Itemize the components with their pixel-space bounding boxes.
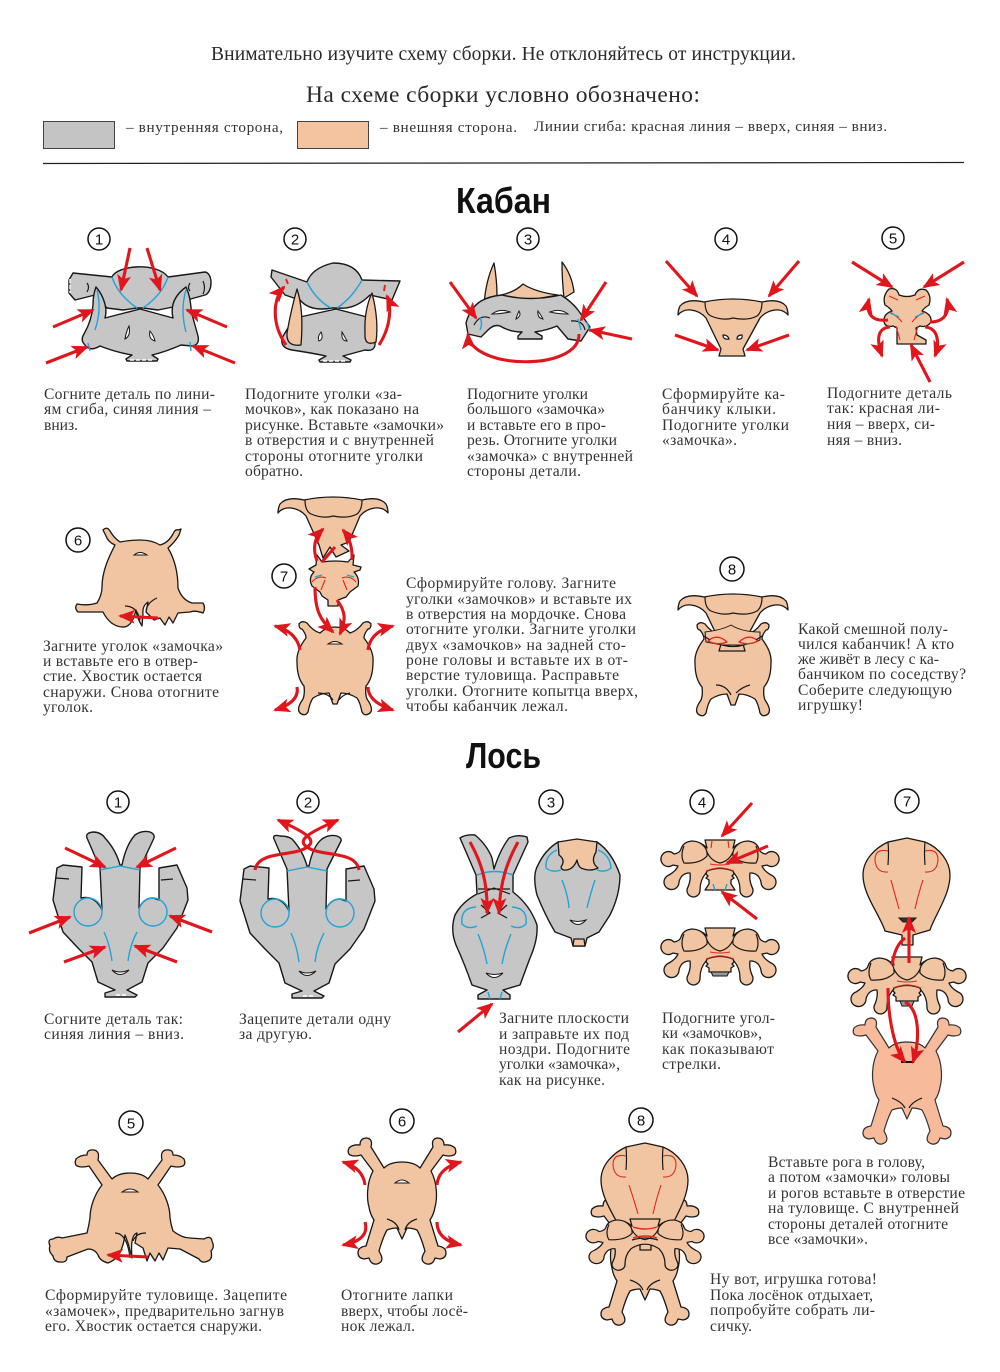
instruction text: «замочка» с внутренней bbox=[467, 448, 633, 465]
panel: moose step 3 bbox=[453, 790, 630, 1089]
arrows bbox=[29, 848, 212, 962]
legend swatch: outer side bbox=[298, 122, 368, 148]
step number 4: 4 bbox=[722, 232, 730, 248]
closing text: сичку. bbox=[710, 1318, 752, 1335]
instruction text: как на рисунке. bbox=[499, 1072, 605, 1089]
legend bbox=[44, 118, 887, 148]
heading: Лось: Лось bbox=[466, 735, 541, 776]
step number 3 bbox=[517, 228, 539, 250]
instruction text: «замочек», предварительно загнув bbox=[45, 1303, 284, 1320]
instruction text: Отогните лапки bbox=[341, 1287, 453, 1304]
part: boar body with legs bbox=[76, 528, 204, 627]
step number 4: 4 bbox=[698, 794, 706, 812]
legend: – внешняя сторона. bbox=[379, 119, 517, 136]
legend: Линии сгиба: красная линия – вверх, синяя – вниз. bbox=[534, 118, 887, 135]
closing text: Пока лосёнок отдыхает, bbox=[710, 1287, 873, 1304]
crossing arrows bbox=[255, 820, 359, 870]
closing text: банчиком по соседству? bbox=[798, 666, 966, 683]
instruction text: стие. Хвостик остается bbox=[43, 668, 202, 685]
closing text: Какой смешной полу- bbox=[798, 621, 948, 638]
instruction text: за другую. bbox=[239, 1026, 312, 1043]
closing text: Соберите следующую bbox=[798, 682, 952, 699]
arrows bbox=[275, 529, 393, 710]
instruction text bbox=[245, 386, 444, 480]
step number 7: 7 bbox=[280, 568, 288, 586]
step number 6 bbox=[66, 528, 90, 552]
part: boar folded ring bbox=[466, 262, 590, 341]
instruction text: снаружи. Снова отогните bbox=[43, 684, 219, 701]
instruction text: Сформируйте туловище. Зацепите bbox=[45, 1287, 287, 1304]
arrows bbox=[343, 1162, 461, 1245]
step number 1 bbox=[88, 228, 110, 250]
part: antler collar upper bbox=[661, 840, 779, 897]
instruction text: Согните деталь так: bbox=[44, 1011, 183, 1028]
part: moose body spread bbox=[49, 1150, 213, 1263]
instruction text: уголок. bbox=[43, 699, 93, 716]
part: boar inner side bbox=[69, 267, 211, 361]
instruction text: Загните уголок «замочка» bbox=[43, 638, 223, 655]
assembled moose bbox=[586, 1143, 704, 1325]
arrow bbox=[120, 616, 158, 618]
closing text bbox=[797, 621, 966, 714]
closing text: же живёт в лесу с ка- bbox=[797, 651, 939, 668]
instruction text bbox=[768, 1154, 965, 1248]
step number 7: 7 bbox=[903, 794, 911, 810]
part: boar head top bbox=[278, 497, 388, 558]
instruction text: уголки «замочка», bbox=[499, 1056, 620, 1073]
instruction text bbox=[662, 1010, 775, 1073]
instruction text bbox=[499, 1010, 630, 1089]
instruction text: а потом «замочки» головы bbox=[768, 1169, 951, 1186]
step number 4 bbox=[715, 228, 737, 250]
step number 5 bbox=[882, 227, 904, 249]
arrows bbox=[722, 803, 768, 919]
step number 3 bbox=[539, 790, 563, 814]
instruction text: Подогните деталь bbox=[827, 385, 952, 402]
panel: boar step 6 bbox=[43, 528, 223, 716]
instruction text: в отверстия на мордочке. Снова bbox=[406, 606, 626, 623]
closing text bbox=[710, 1271, 877, 1335]
step number 4 bbox=[690, 790, 714, 814]
step number 1 bbox=[107, 791, 129, 813]
header instructions: На схеме сборки условно обозначено: bbox=[306, 82, 700, 108]
instruction text: мочков», как показано на bbox=[245, 401, 419, 418]
arrow bbox=[108, 1255, 148, 1257]
heading: Кабан: Кабан bbox=[456, 180, 551, 221]
arrows bbox=[852, 262, 964, 382]
instruction text: стороны детали. bbox=[467, 463, 581, 480]
instruction text: «замочка». bbox=[662, 432, 737, 449]
step number 2: 2 bbox=[304, 794, 312, 812]
legend: – внутренняя сторона, bbox=[125, 119, 283, 136]
part: moose body bbox=[348, 1138, 456, 1264]
instruction text: Загните плоскости bbox=[499, 1010, 629, 1027]
instruction text bbox=[827, 385, 952, 449]
part: moose head inner side bbox=[53, 831, 188, 997]
step number 1: 1 bbox=[114, 794, 122, 812]
legend swatch: inner side bbox=[44, 122, 114, 148]
arrows bbox=[450, 282, 632, 362]
panel: moose step 1 bbox=[29, 791, 212, 1043]
part: boar with tabs bbox=[271, 263, 400, 362]
panel: moose step 2 bbox=[239, 791, 391, 1043]
part: antler collar lower bbox=[661, 928, 779, 985]
header instructions bbox=[211, 44, 796, 108]
step number 6: 6 bbox=[398, 1114, 406, 1130]
instruction text: верстие туловища. Расправьте bbox=[406, 667, 619, 684]
part: antler collar bbox=[848, 957, 966, 1014]
instruction text: уголки. Отогните копытца вверх, bbox=[406, 683, 638, 700]
panel: moose step 6 bbox=[341, 1109, 468, 1335]
instruction text: стороны деталей отогните bbox=[768, 1216, 948, 1233]
instruction text: няя – вниз. bbox=[827, 432, 902, 449]
panel: boar step 4 bbox=[662, 228, 799, 449]
instruction text: на туловище. С внутренней bbox=[768, 1200, 959, 1217]
instruction text bbox=[662, 386, 789, 449]
panel: moose step 7 bbox=[768, 789, 966, 1248]
instruction text: Подогните угол- bbox=[662, 1010, 775, 1027]
instruction text bbox=[406, 575, 638, 715]
step number 8 bbox=[720, 557, 744, 581]
step number 8: 8 bbox=[728, 562, 736, 578]
part: boar snout piece bbox=[309, 555, 361, 606]
panel: boar step 2 bbox=[245, 228, 444, 480]
instruction text: Вставьте рога в голову, bbox=[768, 1154, 925, 1171]
body detail bbox=[318, 642, 350, 700]
panel: moose step 5 bbox=[45, 1111, 287, 1335]
step number 2 bbox=[297, 791, 319, 813]
instruction text: стрелки. bbox=[662, 1056, 721, 1073]
instruction text: стороны отогните уголки bbox=[245, 448, 423, 465]
instruction text: и рогов вставьте в отверстие bbox=[768, 1185, 965, 1202]
instruction text bbox=[239, 1011, 391, 1043]
instruction text: его. Хвостик остается снаружи. bbox=[45, 1318, 262, 1335]
part: boar body bbox=[297, 622, 373, 715]
step number 8: 8 bbox=[637, 1112, 645, 1130]
panel: boar step 1 bbox=[44, 228, 235, 434]
step number 1: 1 bbox=[95, 232, 103, 248]
panel: moose step 8 bbox=[586, 1108, 877, 1335]
instruction text: чтобы кабанчик лежал. bbox=[406, 698, 568, 715]
part: moose head bbox=[863, 838, 950, 945]
instruction text: обратно. bbox=[245, 463, 303, 480]
instruction text: Сформируйте ка- bbox=[662, 386, 785, 403]
arrows bbox=[666, 261, 799, 350]
instruction text: и вставьте его в про- bbox=[467, 417, 606, 434]
instruction text: ям сгиба, синяя линия – bbox=[44, 401, 211, 418]
instruction text: и вставьте его в отвер- bbox=[43, 653, 198, 670]
instruction text: Согните деталь по лини- bbox=[44, 386, 215, 403]
part: boar folded head bbox=[884, 289, 931, 344]
arrows bbox=[888, 918, 918, 1062]
panel: boar step 3 bbox=[450, 228, 633, 480]
instruction text: и заправьте их под bbox=[499, 1026, 629, 1043]
panel: boar step 7 bbox=[272, 497, 638, 715]
instruction text: вверх, чтобы лосё- bbox=[341, 1303, 468, 1320]
step number 6 bbox=[390, 1109, 414, 1133]
instruction text: роне головы и вставьте их в от- bbox=[406, 652, 628, 669]
closing text: попробуйте собрать ли- bbox=[710, 1302, 875, 1319]
instruction text bbox=[43, 638, 223, 716]
step number 3: 3 bbox=[524, 232, 532, 248]
instruction text: Подогните уголки bbox=[467, 386, 588, 403]
closing text: Ну вот, игрушка готова! bbox=[710, 1271, 877, 1288]
instruction text: большого «замочка» bbox=[467, 401, 605, 418]
instruction text: уголки «замочков» и вставьте их bbox=[406, 591, 632, 608]
instruction text bbox=[341, 1287, 468, 1335]
instruction text: банчику клыки. bbox=[662, 401, 776, 418]
closing text: чился кабанчик! А кто bbox=[798, 636, 954, 653]
instruction text: Подогните уголки bbox=[662, 417, 789, 434]
instruction text: Зацепите детали одну bbox=[239, 1011, 391, 1028]
panel: boar step 8 bbox=[678, 557, 966, 716]
instruction text: нок лежал. bbox=[341, 1318, 415, 1335]
part: boar head with tusks bbox=[678, 299, 788, 356]
arrows bbox=[458, 842, 518, 1032]
instruction text bbox=[44, 1011, 184, 1043]
step number 7 bbox=[272, 564, 296, 588]
instruction text: резь. Отогните уголки bbox=[467, 432, 617, 449]
part: moose head folded bbox=[535, 839, 620, 946]
instruction text: ния – вверх, си- bbox=[827, 416, 935, 433]
instruction text: Сформируйте голову. Загните bbox=[406, 575, 616, 592]
step number 5 bbox=[119, 1111, 143, 1135]
instruction text: ки «замочков», bbox=[662, 1025, 762, 1042]
instruction text: синяя линия – вниз. bbox=[44, 1026, 184, 1043]
closing text: игрушку! bbox=[798, 697, 863, 714]
instruction text: рисунке. Вставьте «замочки» bbox=[245, 417, 444, 434]
step number 8 bbox=[629, 1108, 653, 1132]
instruction text: все «замочки». bbox=[768, 1231, 868, 1248]
arrows bbox=[46, 248, 235, 363]
step number 7 bbox=[895, 789, 919, 813]
instruction text: так: красная ли- bbox=[827, 400, 940, 417]
instruction text: как показывают bbox=[662, 1041, 774, 1058]
instruction text bbox=[44, 386, 215, 434]
part: moose head with horns forward bbox=[453, 835, 537, 999]
instruction text bbox=[467, 386, 633, 480]
step number 3: 3 bbox=[547, 794, 555, 812]
step number 5: 5 bbox=[889, 230, 897, 248]
step number 2: 2 bbox=[291, 232, 299, 248]
instruction text: отогните уголки. Загните уголки bbox=[406, 621, 636, 638]
step number 5: 5 bbox=[127, 1116, 135, 1132]
instruction text bbox=[45, 1287, 287, 1335]
step number 6: 6 bbox=[74, 532, 82, 550]
part: moose body bbox=[853, 1018, 961, 1144]
instruction text: вниз. bbox=[44, 417, 78, 434]
step number 2 bbox=[284, 228, 306, 250]
instruction text: в отверстия и с внутренней bbox=[245, 432, 434, 449]
assembled boar bbox=[678, 594, 788, 716]
arrows bbox=[275, 279, 390, 345]
panel: moose step 4 bbox=[661, 790, 779, 1073]
instruction text: Подогните уголки «за- bbox=[245, 386, 402, 403]
panel: boar step 5 bbox=[827, 227, 964, 449]
instruction text: двух «замочков» на задней сто- bbox=[406, 637, 626, 654]
header instructions: Внимательно изучите схему сборки. Не отклоняйтесь от инструкции. bbox=[211, 44, 796, 65]
part: moose head interlocked bbox=[240, 835, 375, 998]
instruction text: ноздри. Подогните bbox=[499, 1041, 630, 1058]
